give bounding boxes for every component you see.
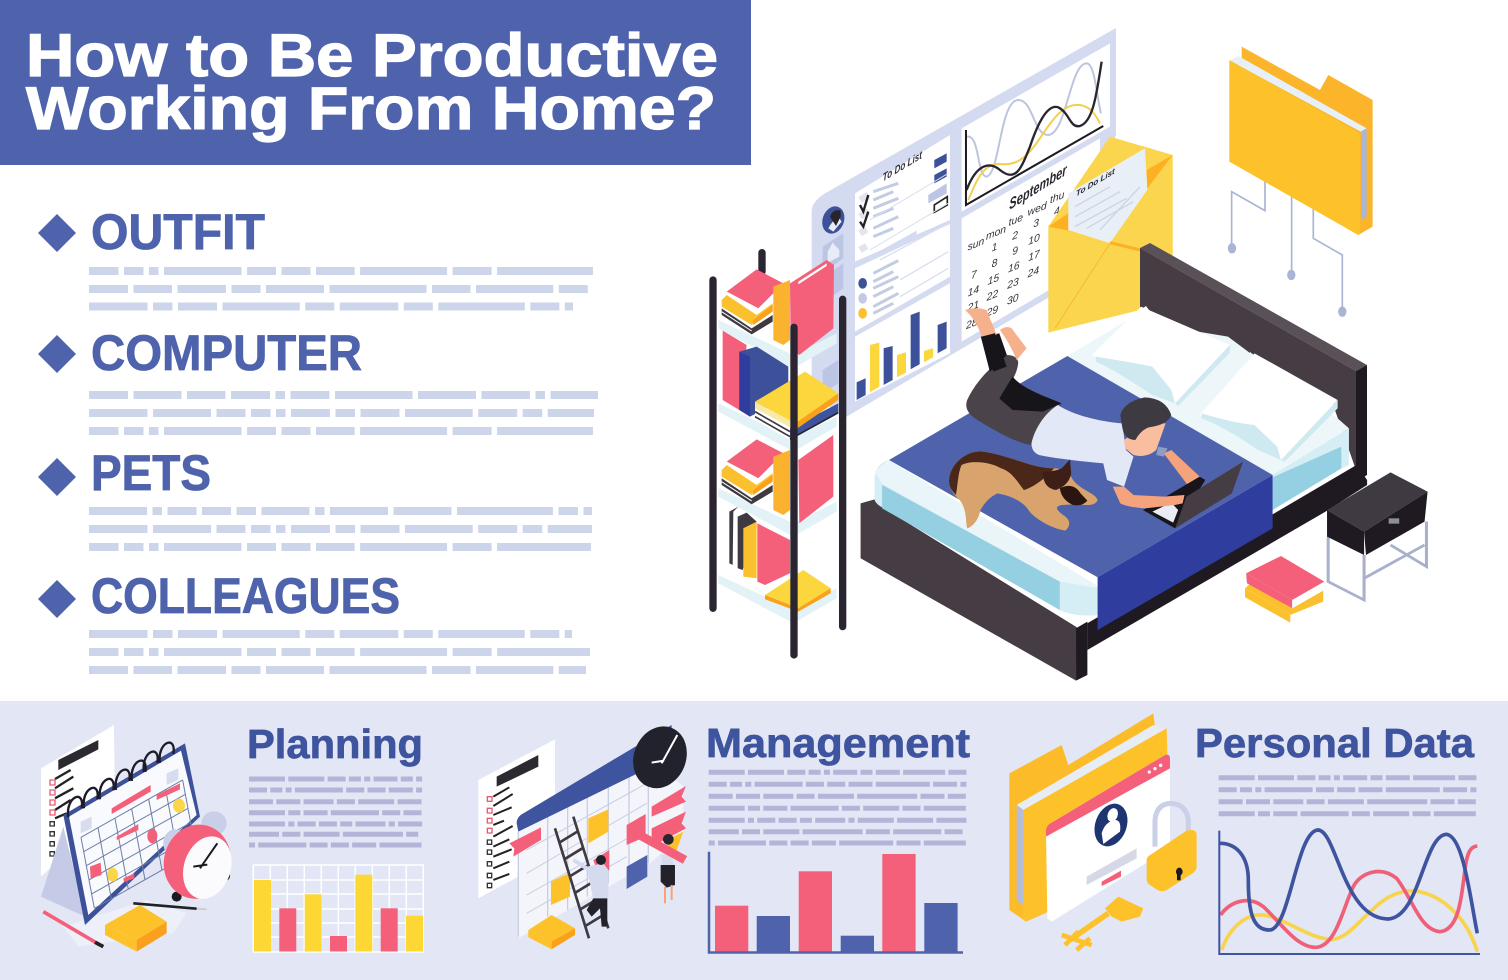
- calendar panel: 1: [992, 241, 997, 255]
- planning illustration: [41, 725, 239, 952]
- section: colleagues: [38, 568, 590, 670]
- title banner: [0, 0, 751, 165]
- books on floor: [1245, 556, 1324, 623]
- wall planner: [509, 725, 686, 938]
- calendar panel: 28: [965, 316, 977, 333]
- section: pets: PETS: [91, 445, 211, 501]
- ladder: [555, 817, 608, 938]
- personal data text: Personal Data: [1195, 720, 1475, 766]
- bed scene: [861, 243, 1428, 681]
- section: colleagues: COLLEAGUES: [91, 568, 400, 624]
- management illustration: [478, 718, 696, 949]
- dog: [949, 452, 1098, 531]
- line chart panel: [962, 43, 1110, 212]
- back post: [751, 253, 773, 272]
- shelf boards: [718, 320, 837, 623]
- front posts: [713, 280, 843, 655]
- sticky note pad: [105, 905, 167, 952]
- calendar panel: 24: [1027, 264, 1039, 281]
- calendar panel: 8: [992, 257, 997, 271]
- section: outfit: [38, 204, 593, 306]
- envelope with to do list: To Do List: [1076, 165, 1116, 198]
- envelope with to do list: [1048, 137, 1173, 333]
- desk calendar: [63, 743, 200, 925]
- sticky note pad: [528, 915, 575, 949]
- person with pencil: [633, 832, 685, 903]
- wall clock: [624, 718, 696, 796]
- stand and paper: [41, 827, 187, 947]
- status list panel: [855, 223, 950, 332]
- dashboard wall screen: [812, 28, 1116, 417]
- bottom shelf books: [729, 507, 831, 612]
- calendar panel: 23: [1006, 276, 1019, 292]
- management text: Management: [706, 720, 970, 766]
- checklist sheet: [41, 725, 115, 877]
- bookshelf: [713, 253, 843, 655]
- bed frame: [861, 465, 1367, 681]
- pencils: [43, 903, 207, 947]
- checklist sheet: [478, 739, 555, 898]
- calendar panel: 16: [1008, 259, 1019, 276]
- top shelf books: [722, 260, 834, 355]
- calendar panel: 17: [1028, 248, 1041, 264]
- calendar panel: September: [1009, 160, 1068, 214]
- calendar panel: 21: [967, 298, 979, 315]
- calendar panel: 29: [986, 303, 998, 320]
- title banner: How to Be Productive: [26, 22, 718, 89]
- connector wires: [1229, 177, 1346, 316]
- profile and icon column: [819, 203, 848, 393]
- to do list panel: To Do List: [883, 148, 923, 184]
- calendar panel: 10: [1028, 232, 1040, 248]
- calendar panel: 15: [988, 272, 999, 288]
- section: computer: COMPUTER: [91, 325, 362, 381]
- person lying on bed: [966, 333, 1203, 490]
- section: outfit: OUTFIT: [91, 204, 265, 260]
- calendar panel: thu: [1050, 189, 1064, 206]
- calendar panel: mon: [986, 223, 1006, 243]
- laptop: [1113, 462, 1243, 528]
- feet: [965, 308, 1027, 372]
- calendar panel: wed: [1028, 199, 1048, 219]
- calendar panel: [962, 138, 1100, 342]
- personal data illustration: [1009, 713, 1197, 950]
- nightstand: [1327, 472, 1428, 600]
- bar chart panel: [855, 283, 950, 402]
- alarm clock: [155, 811, 239, 906]
- pillows: [1092, 307, 1338, 462]
- calendar panel: sun: [968, 235, 984, 254]
- calendar panel: 2: [1011, 229, 1018, 243]
- padlock: [1147, 803, 1197, 891]
- calendar panel: 22: [986, 288, 998, 304]
- management bar chart: [709, 852, 963, 952]
- calendar panel: 7: [971, 268, 978, 282]
- third shelf books: [722, 435, 833, 523]
- section: computer: [38, 325, 598, 431]
- calendar panel: 30: [1007, 292, 1018, 308]
- blanket: [889, 356, 1273, 630]
- calendar panel: 14: [968, 283, 979, 300]
- calendar panel: 3: [1033, 217, 1039, 231]
- floating folder with connector wires: [1229, 47, 1373, 316]
- planning text: Planning: [247, 721, 423, 767]
- calendar panel: 9: [1012, 244, 1018, 258]
- calendar panel: tue: [1009, 212, 1023, 229]
- personal data line chart: [1219, 830, 1480, 954]
- bottom band: [0, 701, 1508, 980]
- mattress and sheets: [875, 320, 1349, 616]
- headboard: [1140, 243, 1367, 482]
- title banner: Working From Home?: [26, 75, 716, 142]
- planning bar chart: [253, 865, 424, 952]
- person climbing ladder: [573, 855, 608, 927]
- to do list panel: [855, 135, 950, 262]
- calendar panel: 4: [1054, 205, 1060, 219]
- second shelf books: [723, 331, 838, 440]
- folder: [1009, 713, 1170, 922]
- key: [1062, 897, 1143, 950]
- login window: [1046, 755, 1170, 922]
- section: pets: [38, 445, 592, 547]
